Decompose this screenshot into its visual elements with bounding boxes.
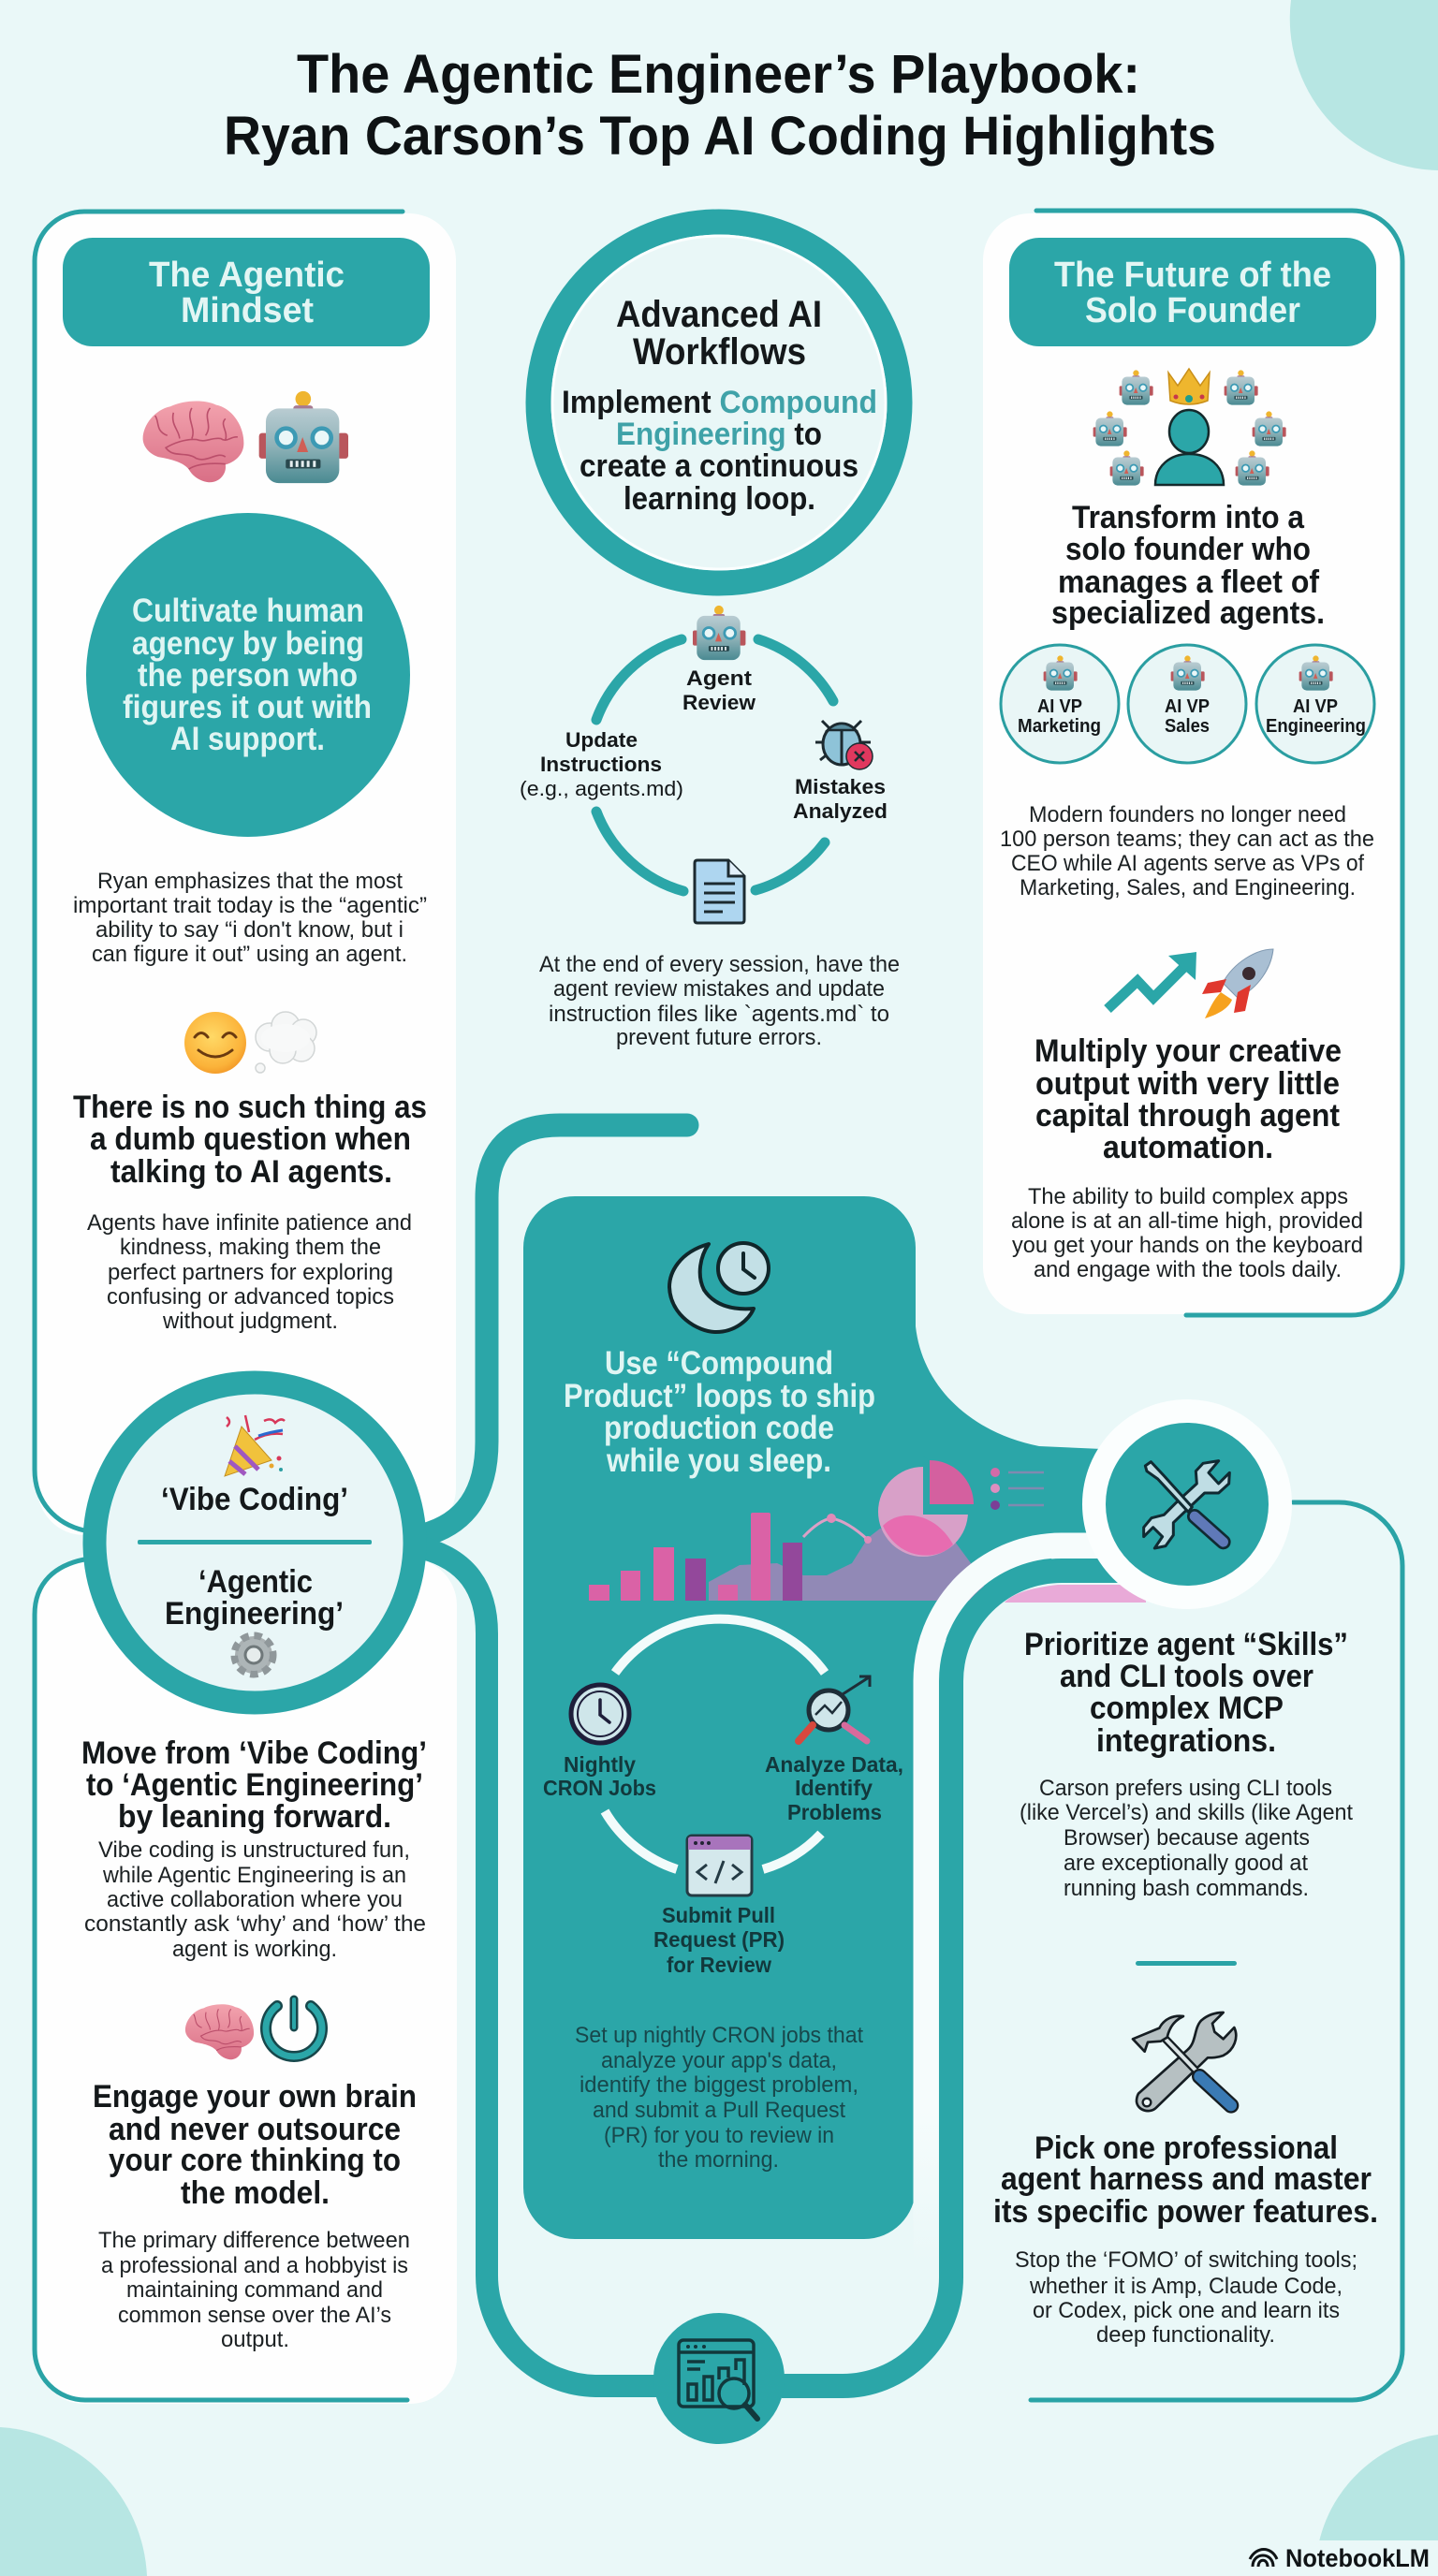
node: analytics icon bbox=[653, 2313, 785, 2444]
heading: no dumb question: There is no such thing as bbox=[73, 1090, 427, 1125]
text block: CLI tools bbox=[1020, 1776, 1353, 1901]
text block: agents patience: kindness, making them the bbox=[120, 1235, 381, 1260]
text block: agentic trait: can figure it out” using an agent. bbox=[92, 942, 407, 967]
label: submit pull request: Request (PR) bbox=[653, 1927, 785, 1952]
node: vibe coding and agentic engineering: ‘Agentic bbox=[198, 1564, 313, 1600]
label: analyze data: Identify bbox=[795, 1776, 873, 1800]
heading: transform into a solo founder: manages a fleet of bbox=[1058, 564, 1320, 600]
heading: pick one harness bbox=[993, 2130, 1378, 2230]
connector: lower link from center node to analytics node bbox=[423, 1548, 660, 2386]
chart base: pink stripe bbox=[1005, 1585, 1146, 1603]
text block: nightly cron description bbox=[575, 2023, 863, 2173]
heading: transform into a solo founder: Transform into a bbox=[1072, 500, 1305, 535]
heading: multiply creative output bbox=[1034, 1033, 1342, 1165]
watermark: NotebookLM: NotebookLM bbox=[1285, 2544, 1430, 2572]
label: agent review bbox=[682, 666, 756, 714]
heading: compound product: while you sleep. bbox=[606, 1442, 831, 1479]
panel: the agentic mindset bbox=[35, 212, 456, 1535]
text block: professional vs hobbyist: a professional and a hobbyist is bbox=[101, 2253, 408, 2278]
label: update instructions bbox=[520, 728, 683, 800]
text block: modern founders: Modern founders no longer need bbox=[1029, 802, 1346, 827]
icon: hammer and wrench bbox=[1133, 2012, 1236, 2111]
badge: AI VP marketing: AI VP bbox=[1037, 696, 1082, 717]
text block: end of every session: prevent future errors. bbox=[616, 1025, 822, 1050]
heading: move from vibe coding: Move from ‘Vibe Coding’ bbox=[81, 1735, 427, 1771]
label: submit pull request: for Review bbox=[667, 1953, 771, 1977]
callout: cultivate human agency: figures it out with bbox=[123, 689, 372, 725]
callout: cultivate human agency: AI support. bbox=[170, 721, 325, 757]
callout: cultivate human agency: the person who bbox=[138, 657, 358, 694]
text block: CLI tools: Carson prefers using CLI tools bbox=[1039, 1776, 1332, 1801]
heading: engage your brain: your core thinking to bbox=[109, 2143, 401, 2178]
badge: AI VP marketing bbox=[1001, 645, 1119, 763]
text block: stop the FOMO bbox=[1015, 2247, 1357, 2348]
badge: AI VP sales: Sales bbox=[1165, 716, 1210, 737]
badge: AI VP sales: AI VP bbox=[1165, 696, 1210, 717]
text block: build complex apps alone: you get your hands on the keyboard bbox=[1012, 1233, 1363, 1258]
panel: advanced AI workflows circle bbox=[538, 222, 900, 583]
text block: end of every session: instruction files like `agents.md` to bbox=[549, 1002, 889, 1027]
heading: compound product: production code bbox=[604, 1410, 834, 1446]
panel: advanced AI workflows circle: Implement Compound bbox=[562, 385, 877, 420]
text block: build complex apps alone: alone is at an all-time high, provided bbox=[1011, 1208, 1363, 1234]
text block: CLI tools: Browser) because agents bbox=[1064, 1825, 1310, 1851]
text block: agentic trait: important trait today is the “agentic” bbox=[73, 893, 427, 918]
heading: prioritize skills: integrations. bbox=[1096, 1723, 1276, 1759]
text block: end of every session: agent review mistakes and update bbox=[553, 976, 885, 1002]
text block: vibe coding description bbox=[84, 1837, 426, 1962]
decorative corner circle: bottom left bbox=[0, 2427, 147, 2576]
diagram: nightly automation loop bbox=[543, 1619, 903, 1977]
text block: modern founders: 100 person teams; they can act as the bbox=[1000, 827, 1374, 852]
badge: AI VP marketing: Marketing bbox=[1018, 716, 1101, 737]
icon: document bbox=[695, 860, 744, 923]
label: analyze data bbox=[765, 1752, 903, 1824]
label: mistakes analyzed bbox=[793, 775, 888, 823]
text block: CLI tools: are exceptionally good at bbox=[1064, 1851, 1308, 1876]
heading: compound product bbox=[564, 1345, 875, 1479]
text block: end of every session: At the end of every session, have the bbox=[539, 952, 900, 977]
text block: stop the FOMO: deep functionality. bbox=[1096, 2322, 1275, 2348]
label: agent review: Agent bbox=[686, 666, 753, 690]
label: nightly cron jobs bbox=[543, 1752, 656, 1800]
icon: founder with crown and robot fleet bbox=[1093, 369, 1286, 486]
panel: vibe to agentic engineering bbox=[35, 1559, 457, 2404]
callout: cultivate human agency: agency by being bbox=[132, 625, 364, 662]
label: mistakes analyzed: Mistakes bbox=[795, 775, 886, 798]
badge: AI VP engineering: Engineering bbox=[1266, 716, 1366, 737]
text block: agentic trait: Ryan emphasizes that the most bbox=[97, 869, 403, 894]
icon: bug with error badge bbox=[815, 721, 873, 769]
text block: vibe coding description: Vibe coding is unstructured fun, bbox=[98, 1837, 410, 1863]
heading: prioritize skills bbox=[1024, 1627, 1348, 1759]
heading: engage your brain: Engage your own brain bbox=[93, 2079, 417, 2115]
text block: vibe coding description: active collaboration where you bbox=[107, 1887, 403, 1912]
text block: end of every session bbox=[539, 952, 900, 1050]
decorative corner circle: bottom right bbox=[1315, 2435, 1438, 2576]
text block: nightly cron description: the morning. bbox=[658, 2147, 779, 2173]
icon: wrench and screwdriver bbox=[1144, 1461, 1229, 1548]
text block: agents patience: confusing or advanced topics bbox=[107, 1284, 394, 1310]
text block: nightly cron description: (PR) for you to review in bbox=[604, 2123, 834, 2148]
title: The Agentic Engineer’s Playbook: bbox=[297, 44, 1140, 105]
label: update instructions: Instructions bbox=[540, 753, 662, 776]
heading: transform into a solo founder: solo founder who bbox=[1065, 532, 1311, 567]
heading: compound product: Use “Compound bbox=[605, 1345, 833, 1382]
heading: move from vibe coding: by leaning forward. bbox=[118, 1799, 391, 1835]
title bbox=[224, 44, 1216, 167]
diagram: continuous learning loop bbox=[520, 606, 888, 923]
text block: build complex apps alone: and engage with the tools daily. bbox=[1034, 1257, 1342, 1282]
heading: prioritize skills: Prioritize agent “Skills” bbox=[1024, 1627, 1348, 1662]
label: agent review: Review bbox=[682, 691, 756, 714]
text block: agentic trait: ability to say “i don't know, but i bbox=[95, 917, 404, 943]
panel: advanced AI workflows circle: learning loop. bbox=[624, 481, 815, 517]
panel header: The Future of the bbox=[1054, 256, 1331, 295]
icon: party popper bbox=[225, 1415, 285, 1476]
label: update instructions: (e.g., agents.md) bbox=[520, 777, 683, 800]
badge: AI VP engineering: AI VP bbox=[1293, 696, 1338, 717]
heading: pick one harness: its specific power features. bbox=[993, 2194, 1378, 2230]
text block: build complex apps alone: The ability to build complex apps bbox=[1028, 1184, 1348, 1209]
text block: agents patience: Agents have infinite patience and bbox=[87, 1210, 412, 1236]
icon: growth arrow and rocket bbox=[1108, 949, 1273, 1018]
badge: AI VP engineering bbox=[1256, 645, 1374, 763]
icon: code window bbox=[687, 1836, 752, 1895]
text block: stop the FOMO: whether it is Amp, Claude Code, bbox=[1029, 2274, 1343, 2299]
text block: professional vs hobbyist: common sense over the AI’s bbox=[118, 2303, 391, 2328]
heading: no dumb question bbox=[73, 1090, 427, 1190]
panel: advanced AI workflows circle: Advanced AI bbox=[616, 294, 822, 335]
panel header bbox=[1009, 238, 1376, 346]
heading: engage your brain: the model. bbox=[181, 2175, 330, 2211]
label: mistakes analyzed: Analyzed bbox=[793, 799, 888, 823]
label: nightly cron jobs: CRON Jobs bbox=[543, 1776, 656, 1800]
heading: multiply creative output: automation. bbox=[1103, 1130, 1273, 1165]
panel header bbox=[63, 238, 430, 346]
text block: professional vs hobbyist bbox=[98, 2228, 410, 2352]
heading: multiply creative output: Multiply your creative bbox=[1034, 1033, 1342, 1069]
panel: skills and harness bbox=[993, 1502, 1402, 2400]
panel: advanced AI workflows circle: create a continuous bbox=[580, 448, 858, 484]
panel header: Solo Founder bbox=[1085, 291, 1300, 330]
chart: data graphic with bars, area, line and pie bbox=[589, 1456, 1044, 1601]
callout: cultivate human agency: Cultivate human bbox=[132, 593, 364, 629]
panel: advanced AI workflows circle: Engineering to bbox=[616, 417, 822, 452]
icon: robot bbox=[693, 606, 745, 660]
callout: cultivate human agency bbox=[86, 513, 410, 837]
text block: agentic trait bbox=[73, 869, 427, 967]
text block: nightly cron description: identify the biggest problem, bbox=[580, 2072, 858, 2098]
heading: no dumb question: talking to AI agents. bbox=[110, 1154, 392, 1190]
connector: teal arc from tools node to analytics node bbox=[782, 1571, 1123, 2386]
text block: professional vs hobbyist: The primary difference between bbox=[98, 2228, 410, 2253]
text block: nightly cron description: and submit a Pull Request bbox=[593, 2098, 845, 2123]
heading: engage your brain: and never outsource bbox=[109, 2112, 401, 2147]
label: submit pull request: Submit Pull bbox=[662, 1903, 775, 1927]
icon: clock bbox=[571, 1685, 629, 1743]
heading: multiply creative output: output with very little bbox=[1035, 1066, 1340, 1102]
text block: CLI tools: running bash commands. bbox=[1064, 1876, 1309, 1901]
heading: no dumb question: a dumb question when bbox=[90, 1121, 411, 1157]
text block: stop the FOMO: Stop the ‘FOMO’ of switching tools; bbox=[1015, 2247, 1357, 2273]
text block: modern founders: CEO while AI agents serve as VPs of bbox=[1011, 851, 1364, 876]
heading: multiply creative output: capital through agent bbox=[1035, 1098, 1340, 1134]
heading: pick one harness: agent harness and master bbox=[1001, 2161, 1372, 2197]
icon: brain and robot bbox=[143, 391, 348, 483]
heading: pick one harness: Pick one professional bbox=[1034, 2130, 1338, 2166]
heading: prioritize skills: and CLI tools over bbox=[1060, 1659, 1313, 1694]
text block: stop the FOMO: or Codex, pick one and learn its bbox=[1033, 2298, 1340, 2323]
label: submit pull request bbox=[653, 1903, 785, 1977]
watermark: NotebookLM bbox=[1242, 2540, 1438, 2576]
panel: future of the solo founder bbox=[983, 211, 1402, 1315]
text block: CLI tools: (like Vercel’s) and skills (like Agent bbox=[1020, 1800, 1353, 1825]
badge: AI VP sales bbox=[1128, 645, 1246, 763]
text block: vibe coding description: constantly ask ‘why’ and ‘how’ the bbox=[84, 1911, 426, 1937]
text block: vibe coding description: agent is working. bbox=[172, 1937, 337, 1962]
icon: brain and power bbox=[185, 1999, 322, 2059]
heading: prioritize skills: complex MCP bbox=[1090, 1690, 1284, 1726]
label: analyze data: Problems bbox=[787, 1800, 882, 1824]
panel header: The Agentic bbox=[149, 256, 345, 295]
text block: vibe coding description: while Agentic Engineering is an bbox=[102, 1863, 406, 1888]
panel header: Mindset bbox=[181, 291, 314, 330]
panel: advanced AI workflows circle: Workflows bbox=[633, 331, 806, 373]
heading: engage your brain bbox=[93, 2079, 417, 2211]
text block: professional vs hobbyist: output. bbox=[221, 2327, 289, 2352]
text block: build complex apps alone bbox=[1011, 1184, 1363, 1282]
panel: compound product loops bbox=[523, 1196, 1123, 2239]
text block: agents patience: without judgment. bbox=[162, 1309, 338, 1334]
node: vibe coding and agentic engineering: ‘Vibe Coding’ bbox=[161, 1482, 348, 1517]
heading: move from vibe coding: to ‘Agentic Engineering’ bbox=[86, 1767, 423, 1803]
connector: upper link from center node to compound panel bbox=[423, 1125, 687, 1535]
connector: white halo arc bbox=[926, 1545, 1123, 2265]
heading: compound product: Product” loops to ship bbox=[564, 1378, 875, 1414]
icon: smiley and thought cloud bbox=[184, 1012, 316, 1074]
label: analyze data: Analyze Data, bbox=[765, 1752, 903, 1777]
heading: move from vibe coding bbox=[81, 1735, 427, 1835]
text block: modern founders bbox=[1000, 802, 1374, 900]
text block: professional vs hobbyist: maintaining command and bbox=[126, 2277, 383, 2303]
text block: agents patience bbox=[87, 1210, 412, 1334]
title: Ryan Carson’s Top AI Coding Highlights bbox=[224, 106, 1216, 167]
text block: nightly cron description: analyze your app's data, bbox=[601, 2048, 837, 2073]
label: update instructions: Update bbox=[565, 728, 638, 752]
node: vibe coding and agentic engineering bbox=[95, 1383, 415, 1703]
icon: moon and clock bbox=[669, 1243, 769, 1332]
decorative corner circle: top right bbox=[1290, 0, 1438, 170]
text block: agents patience: perfect partners for exploring bbox=[108, 1260, 393, 1285]
label: nightly cron jobs: Nightly bbox=[564, 1752, 636, 1777]
heading: transform into a solo founder bbox=[1051, 500, 1325, 631]
icon: gear bbox=[235, 1636, 272, 1674]
icon: magnifier with trend bbox=[799, 1676, 870, 1741]
heading: transform into a solo founder: specialized agents. bbox=[1051, 595, 1325, 631]
text block: nightly cron description: Set up nightly CRON jobs that bbox=[575, 2023, 863, 2048]
text block: modern founders: Marketing, Sales, and Engineering. bbox=[1020, 875, 1356, 900]
node: tools icon bbox=[1082, 1399, 1292, 1609]
node: vibe coding and agentic engineering: Engineering’ bbox=[165, 1596, 344, 1632]
